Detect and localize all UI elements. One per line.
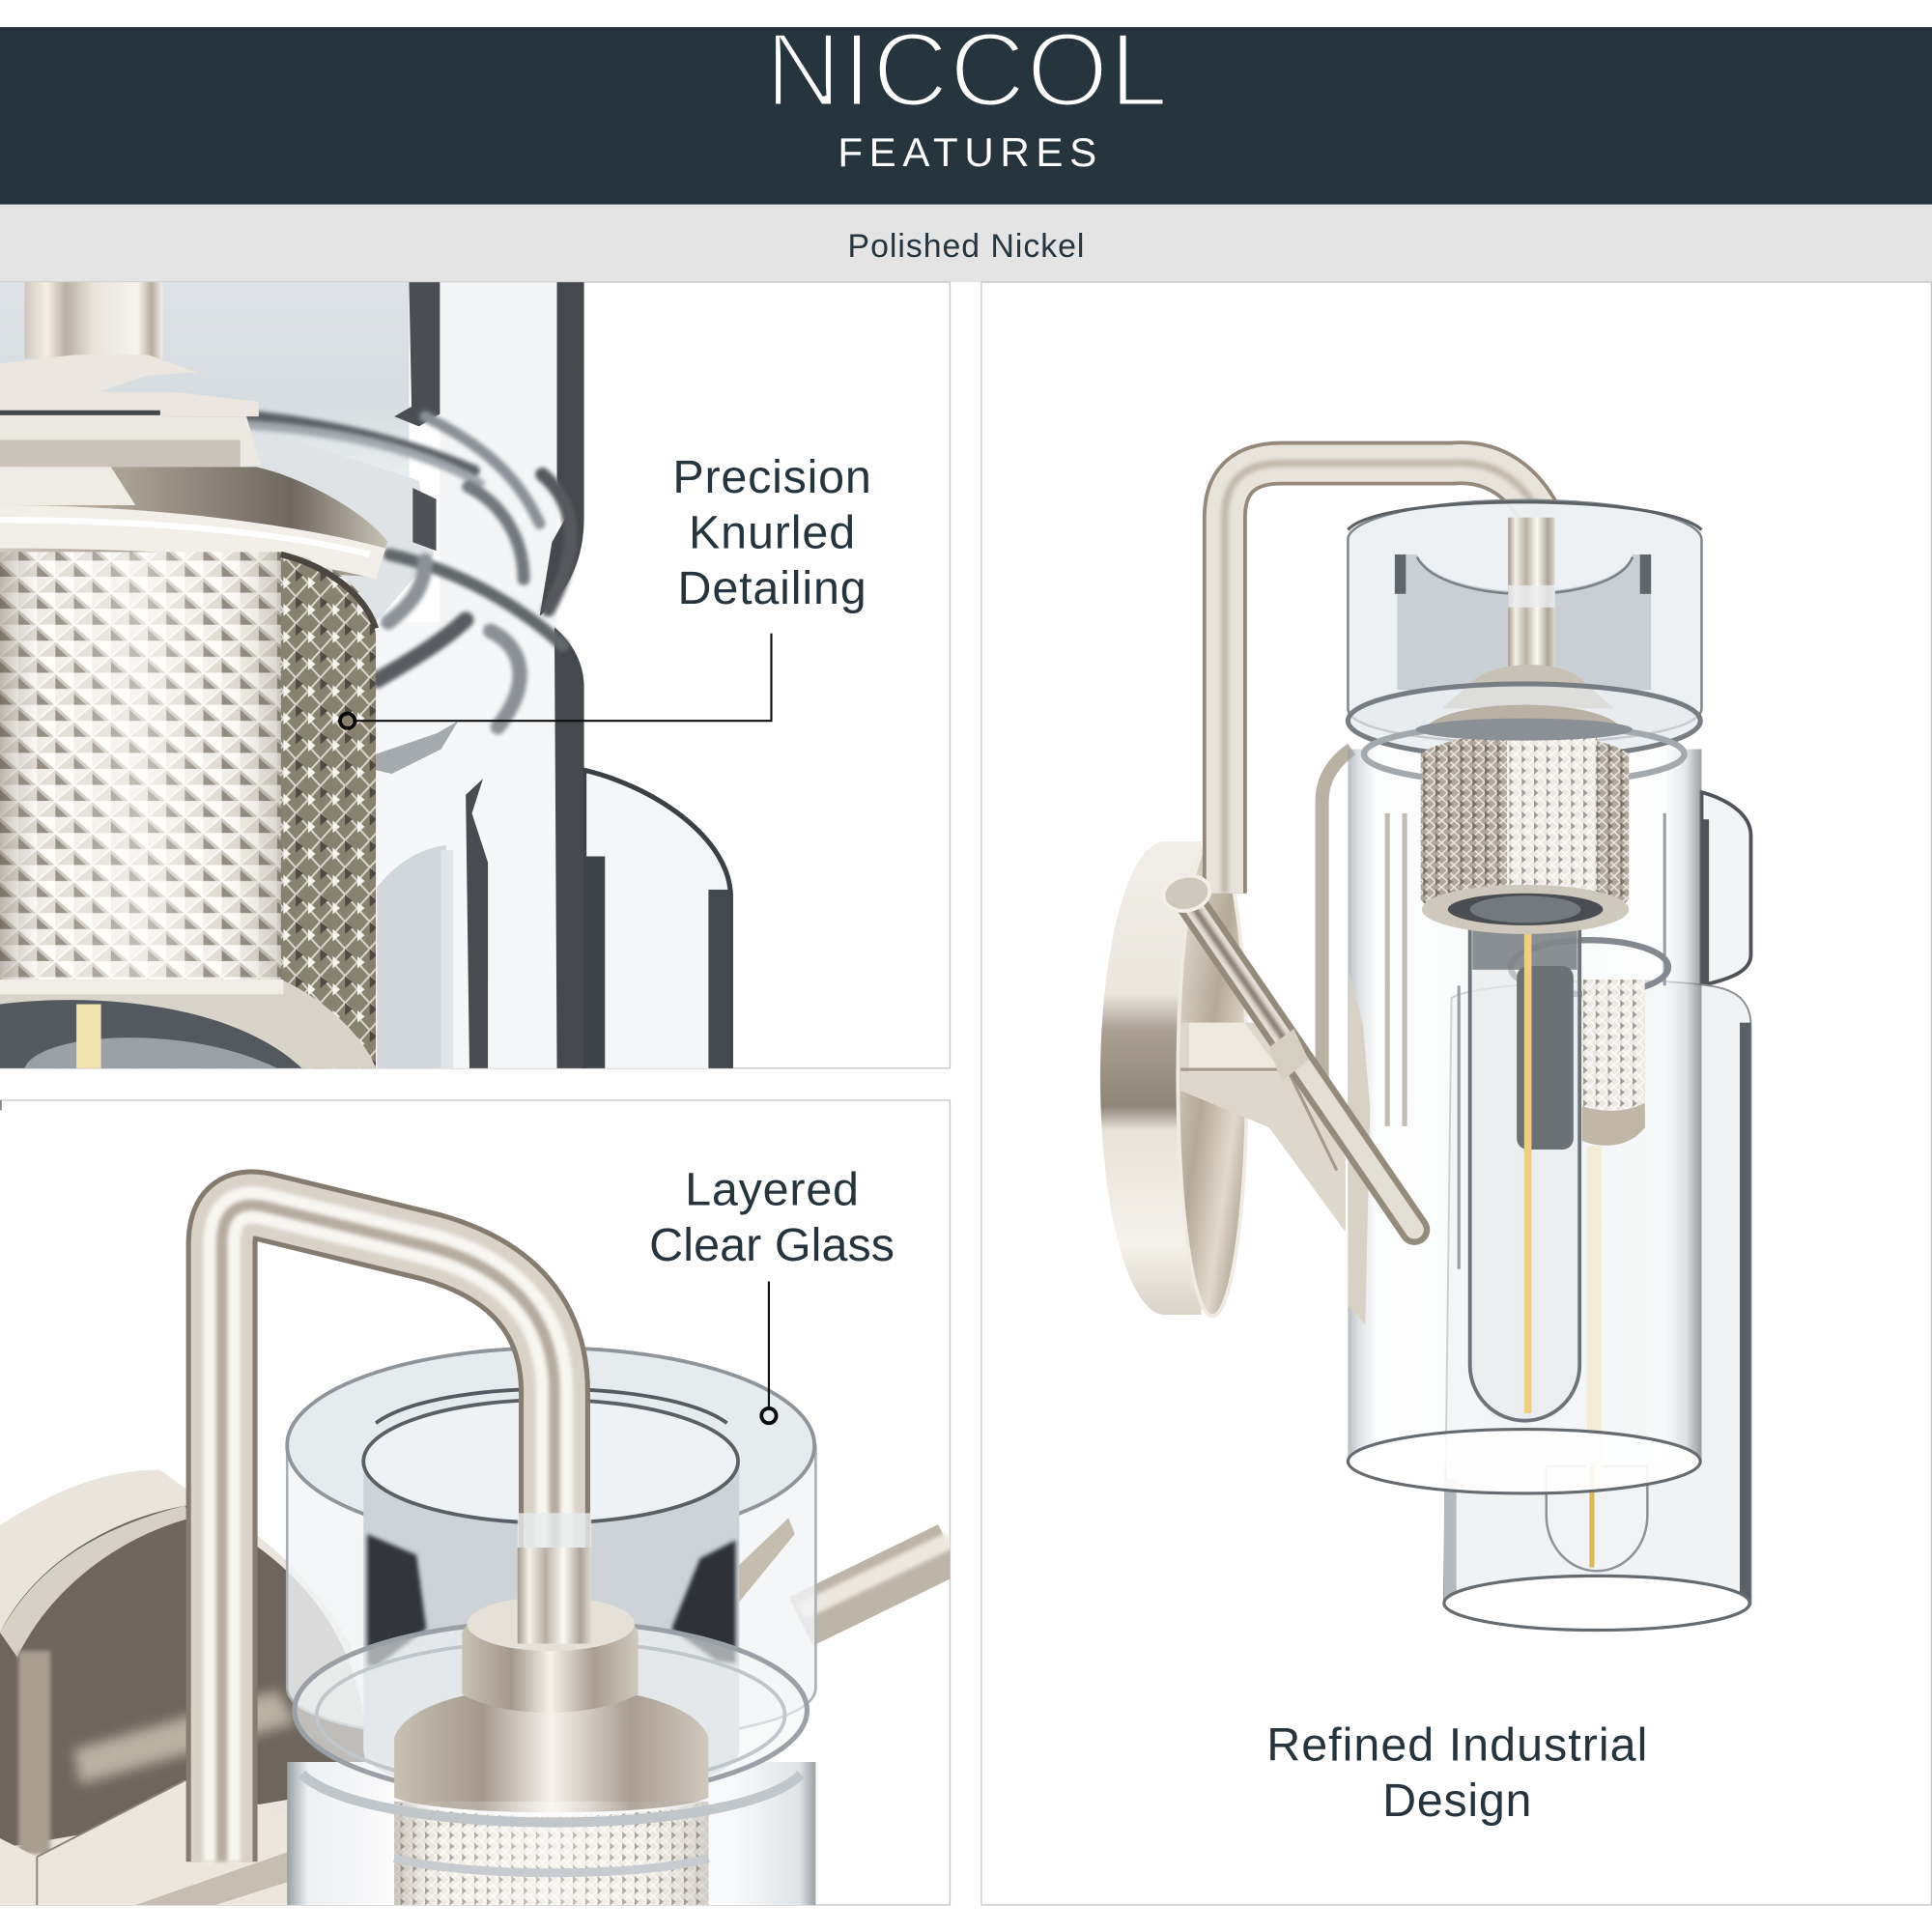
bulb inside the sleeve: [0, 1000, 301, 1068]
callout: Precision Knurled Detailing: Knurled: [689, 507, 855, 559]
callout: Precision Knurled Detailing: Precision: [672, 451, 871, 503]
glass ring dark bands: [164, 411, 571, 727]
arm end cap: [1160, 871, 1213, 915]
dark inner edge of the upper glass: [394, 282, 440, 426]
front bulb: [1470, 906, 1579, 1421]
translucent white band: [0, 505, 385, 579]
arched arm: [1225, 463, 1540, 894]
corner tick: [0, 1100, 2, 1110]
rear glass bottom opening: [1444, 1576, 1749, 1631]
callout: Layered Clear Glass: Layered: [685, 1163, 859, 1215]
rear knurl ring: [1511, 940, 1668, 994]
front glass lower body: [1348, 750, 1701, 1462]
rear glass cylinder: [584, 770, 730, 1072]
front glass upper cup: [1348, 500, 1701, 743]
knurled sleeve: [0, 552, 376, 1068]
front knurl sleeve: [1421, 734, 1629, 925]
inner cylinder top opening: [363, 1400, 738, 1523]
bracket at bottom: [0, 1780, 259, 1857]
panel: full fixture: [981, 282, 1931, 1905]
rear glass lower body: [1444, 980, 1750, 1629]
rod going right: [801, 1548, 950, 1622]
upper glass: [0, 282, 409, 497]
diagonal cross arm: [1186, 897, 1414, 1230]
back arch behind: [1322, 750, 1351, 1096]
lower collar ring: [301, 1775, 801, 1822]
rear glass reflections in front body: [1459, 813, 1664, 1269]
stacked metal discs: [0, 355, 259, 416]
cross arm collar: [1269, 1029, 1309, 1082]
glass rim: [285, 1347, 816, 1517]
collar glass ring: [295, 1622, 807, 1799]
caption: Refined Industrial Design: [1266, 1719, 1647, 1827]
lower glass: [376, 622, 557, 1072]
glass lower section: [287, 1762, 815, 1907]
header band: [0, 12, 1932, 205]
metal collar above knurl: [0, 467, 388, 577]
subtitle: FEATURES: FEATURES: [838, 129, 1096, 175]
top metal column: [25, 282, 162, 358]
rear knurl sleeve: [1582, 980, 1645, 1146]
callout: Precision Knurled Detailing: [340, 451, 871, 728]
arm seen through the glass: [739, 1518, 795, 1602]
sleeve bottom ring: [1422, 885, 1629, 934]
panel: layered glass: [0, 1100, 950, 1907]
panel: knurled detail: [0, 282, 950, 1072]
callout: Layered Clear Glass: Clear Glass: [649, 1219, 895, 1271]
inner cylinder body: [363, 1462, 739, 1796]
caption: Refined Industrial Design: Design: [1382, 1775, 1531, 1827]
horizontal bracket: [1180, 1023, 1346, 1233]
dark reflections inside the inner cylinder: [367, 1534, 426, 1665]
metal base ring: [0, 980, 376, 1068]
wall plate rim: [0, 1470, 366, 1857]
wall plate dark interior: [0, 1506, 365, 1848]
rear glass upper cup: [1701, 792, 1750, 985]
finish band: Polished Nickel: Polished Nickel: [848, 228, 1084, 265]
metal skirt: [394, 1687, 708, 1812]
title: NICCOL: NICCOL: [765, 12, 1168, 129]
glass body under the ring: [261, 468, 434, 622]
glass collar ring: [1348, 684, 1700, 757]
close-up illustration: knurled sleeve in glass: [0, 282, 730, 1072]
callout: Precision Knurled Detailing: Detailing: [678, 562, 867, 614]
finish band: Polished Nickel: [0, 205, 1932, 282]
reflected arm blade: [1348, 974, 1370, 1324]
close-up illustration: arched arm and glass: [0, 1205, 950, 1907]
product illustration: wall sconce: [1100, 463, 1750, 1631]
knurl below collar: [394, 1802, 708, 1905]
rear bulb and glow: [1547, 1466, 1647, 1571]
neck of glass with dark edge: [554, 627, 584, 1068]
wall plate: [1100, 841, 1202, 1315]
metal dome above knurl: [1423, 705, 1623, 730]
metal cap: [1441, 665, 1614, 708]
caption: Refined Industrial Design: Refined Industrial: [1266, 1719, 1647, 1772]
stepped metal cap: [462, 1625, 639, 1712]
arched tube: [222, 1205, 554, 1861]
front filament: [1524, 894, 1531, 1413]
callout: Layered Clear Glass: [649, 1163, 895, 1423]
glass outer cylinder: [286, 1441, 817, 1729]
front glass bottom opening: [1348, 1430, 1700, 1493]
stem: [1508, 518, 1555, 678]
dark outer edge of the upper glass: [540, 282, 584, 616]
